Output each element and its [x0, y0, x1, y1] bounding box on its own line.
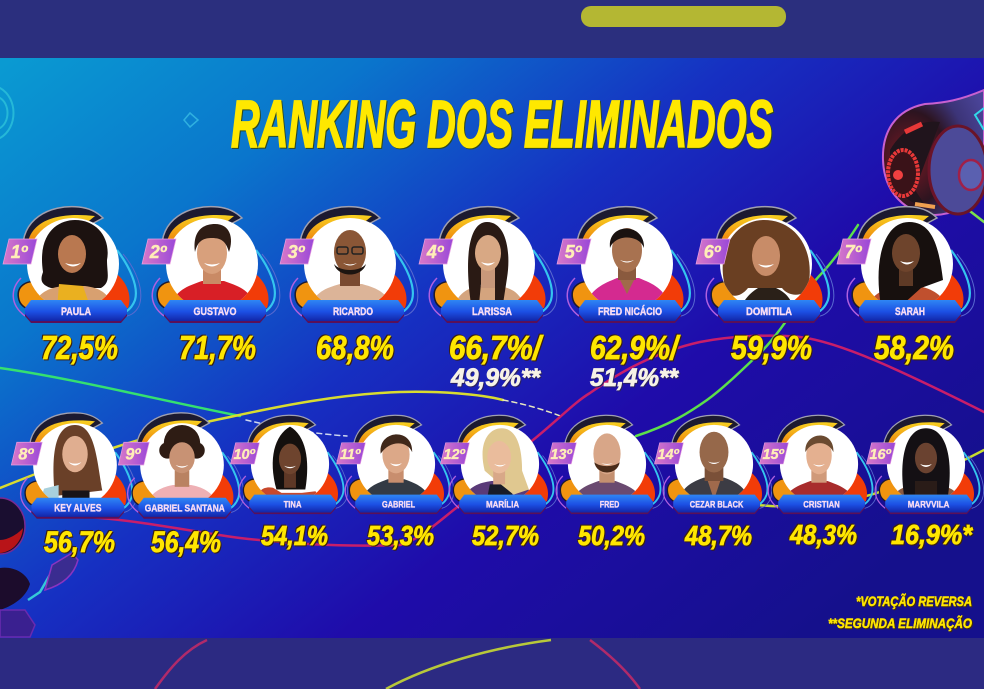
card: Sarah 7º	[837, 207, 975, 323]
card: Fred 13º	[548, 415, 665, 514]
card: Marvvila 16º: MARVVILA	[908, 499, 950, 509]
card: Fred 13º: 13º	[550, 447, 572, 463]
card: Ricardo 3º: 3º	[288, 242, 306, 262]
percentages: second row: 16,9%*	[891, 519, 973, 550]
card: Gustavo 2º	[142, 207, 280, 323]
card: Gabriel Santana 9º: 9º	[125, 446, 141, 464]
card: Domitila 6º	[696, 207, 834, 323]
percentages: second row: 54,1%	[261, 520, 328, 551]
percentages: first row: 59,9%	[731, 329, 812, 366]
percentages: second row: 50,2%	[578, 520, 645, 551]
decorative curves	[0, 88, 984, 546]
card: Fred Nicácio 5º	[557, 207, 695, 323]
percentages: first row: 49,9%**	[450, 364, 541, 392]
card: Tina 10º: 10º	[233, 447, 255, 463]
percentages: second row: 53,3%	[367, 520, 434, 551]
card: Larissa 4º: 4º	[426, 242, 445, 262]
card: Cezar Black 14º: 14º	[657, 447, 679, 463]
card: Cezar Black 14º: CEZAR BLACK	[690, 499, 744, 509]
percentages: first row: 72,5%	[41, 329, 118, 366]
card: Domitila 6º: 6º	[704, 242, 722, 262]
card: Larissa 4º: LARISSA	[472, 306, 512, 318]
card: Paula 1º	[3, 207, 141, 323]
card: Paula 1º: 1º	[11, 242, 29, 262]
percentages: first row	[41, 329, 954, 392]
bottom band	[0, 638, 984, 689]
card: Gabriel 11º: GABRIEL	[382, 499, 415, 509]
card: Gabriel 11º: 11º	[340, 447, 361, 463]
icon: robot eye, top right	[883, 90, 984, 215]
card: Sarah 7º: SARAH	[895, 306, 925, 318]
card: Marília 12º: MARÍLIA	[486, 499, 519, 509]
card: Key Alves 8º: 8º	[18, 446, 34, 464]
card: Paula 1º: PAULA	[61, 306, 91, 318]
percentages: second row: 56,7%	[44, 526, 115, 559]
card: Marvvila 16º	[866, 415, 984, 514]
card: Ricardo 3º: RICARDO	[333, 306, 373, 318]
percentages: first row: 58,2%	[874, 329, 954, 366]
percentages: second row: 52,7%	[472, 520, 539, 551]
card: Gabriel Santana 9º: GABRIEL SANTANA	[145, 503, 225, 514]
percentages: first row: 51,4%**	[590, 364, 679, 392]
card: Marília 12º: 12º	[443, 447, 465, 463]
card: Fred Nicácio 5º: 5º	[565, 242, 583, 262]
card: Key Alves 8º	[11, 413, 137, 519]
card: Gabriel 11º	[336, 415, 454, 514]
percentages: first row: 62,9%/	[590, 329, 681, 366]
card: Cristian 15º: CRISTIAN	[803, 499, 840, 509]
card: Tina 10º	[230, 415, 348, 514]
card: Gustavo 2º: 2º	[149, 242, 168, 262]
card: Gustavo 2º: GUSTAVO	[194, 306, 237, 318]
percentages: second row	[44, 519, 973, 559]
icon: robot figure, bottom left	[0, 498, 78, 637]
card: Tina 10º: TINA	[284, 499, 302, 509]
footnotes	[828, 592, 972, 631]
card: Domitila 6º: DOMITILA	[746, 306, 792, 318]
top band	[0, 0, 984, 58]
percentages: second row: 48,3%	[789, 519, 857, 550]
card: Key Alves 8º: KEY ALVES	[54, 502, 101, 514]
card: Cristian 15º	[760, 415, 877, 514]
percentages: second row: 56,4%	[151, 526, 221, 559]
card: Fred Nicácio 5º: FRED NICÁCIO	[598, 305, 662, 318]
card: Gabriel Santana 9º	[118, 413, 244, 519]
card: Cristian 15º: 15º	[762, 447, 784, 463]
card: Marília 12º	[440, 415, 558, 514]
card: Cezar Black 14º	[654, 415, 772, 514]
card: Sarah 7º: 7º	[845, 242, 863, 262]
percentages: first row: 71,7%	[179, 329, 256, 366]
card: Fred 13º: FRED	[600, 499, 620, 509]
card: Marvvila 16º: 16º	[869, 447, 891, 463]
yellow pill	[581, 6, 786, 27]
percentages: first row: 68,8%	[316, 329, 394, 366]
card: Larissa 4º	[419, 207, 557, 323]
card: Ricardo 3º	[280, 207, 418, 323]
percentages: second row: 48,7%	[684, 520, 752, 551]
percentages: first row: 66,7%/	[449, 329, 544, 366]
